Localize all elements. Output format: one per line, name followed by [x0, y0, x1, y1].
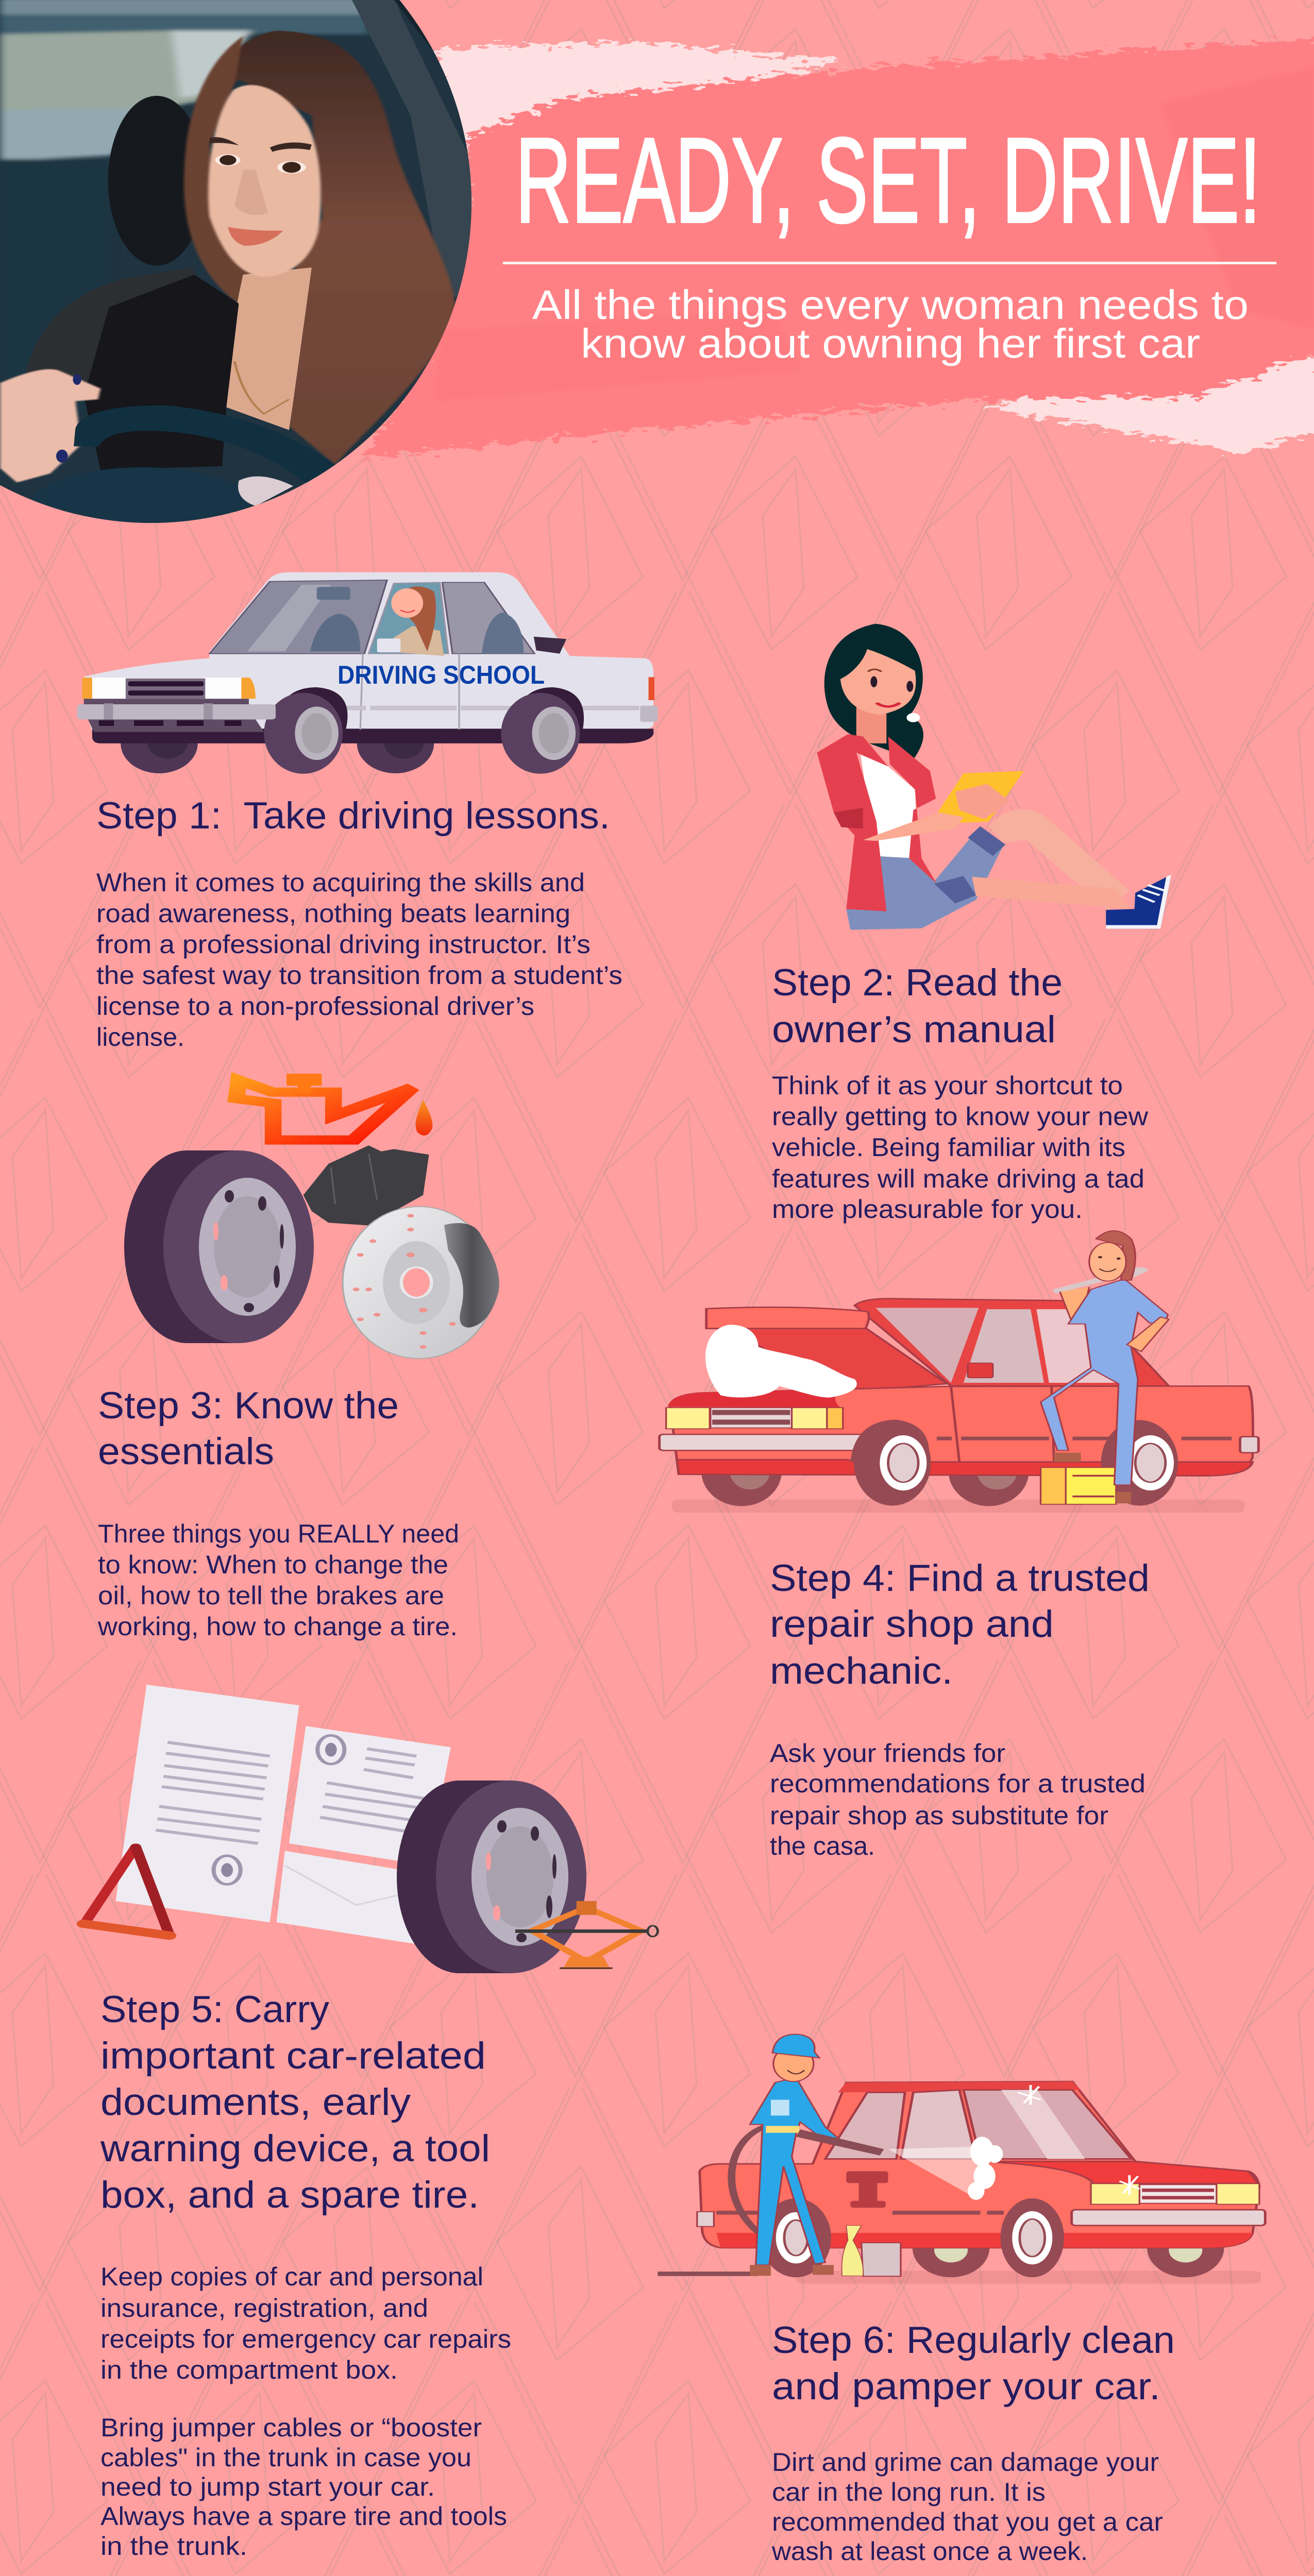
- heading: step 4: [770, 1557, 1150, 1692]
- body: step 4: Ask your friends for: [770, 1739, 1005, 1768]
- body: step 5: receipts for emergency car repairs: [100, 2325, 511, 2353]
- heading: step 4: repair shop and: [770, 1603, 1054, 1645]
- heading: step 6: Step 6: Regularly clean: [772, 2319, 1175, 2361]
- body: step 1: license.: [96, 1023, 184, 1052]
- body: step 5: in the trunk.: [100, 2532, 247, 2561]
- heading: step 5: box, and a spare tire.: [100, 2174, 479, 2216]
- body: step 1: road awareness, nothing beats learning: [96, 899, 570, 928]
- smoke: [705, 1325, 857, 1398]
- body: step 6: car in the long run. It is: [772, 2478, 1046, 2506]
- body: step 3: oil, how to tell the brakes are: [98, 1581, 444, 1610]
- body: step 3: working, how to change a tire.: [97, 1612, 458, 1641]
- illustration: car wash: [658, 2034, 1265, 2284]
- hose: [658, 2126, 767, 2274]
- car jack: [515, 1901, 658, 1968]
- body: step 5: insurance, registration, and: [100, 2294, 428, 2323]
- body: step 1: license to a non-professional driver’s: [96, 992, 534, 1021]
- body: step 3: [97, 1519, 459, 1641]
- body: step 5: Bring jumper cables or “booster: [100, 2413, 482, 2442]
- body: step 2: more pleasurable for you.: [772, 1195, 1083, 1224]
- header divider: [503, 262, 1276, 264]
- illustration: oil can, tyre and brake: [124, 1074, 499, 1359]
- heading: step 1: Step 1: Take driving lessons.: [96, 795, 610, 837]
- icon: oil can: [237, 1074, 432, 1140]
- heading: step 2: Step 2: Read the: [772, 962, 1063, 1004]
- heading: step 5: Step 5: Carry: [100, 1989, 330, 2030]
- heading: step 5: [100, 1989, 490, 2216]
- spray and foam: [888, 2147, 980, 2198]
- heading: step 2: [772, 962, 1063, 1050]
- body: step 2: [772, 1071, 1149, 1224]
- body: step 4: repair shop as substitute for: [770, 1801, 1108, 1830]
- heading: step 5: documents, early: [100, 2081, 411, 2123]
- icon: tyre: [124, 1150, 314, 1343]
- heading: step 3: essentials: [98, 1431, 274, 1472]
- warning triangle: [84, 1847, 169, 1936]
- body: step 4: recommendations for a trusted: [770, 1769, 1145, 1798]
- body: step 6: Dirt and grime can damage your: [772, 2448, 1159, 2477]
- driving school label: DRIVING SCHOOL: [338, 660, 545, 689]
- body: step 1: [96, 868, 622, 1052]
- body: step 1: When it comes to acquiring the skills and: [96, 868, 585, 897]
- body: step 1: from a professional driving instructor. It’s: [96, 930, 591, 959]
- body: step 5: Keep copies of car and personal: [100, 2262, 483, 2291]
- icon: brake disc and pad: [304, 1145, 499, 1359]
- body: step 3: Three things you REALLY need: [98, 1519, 459, 1548]
- body: step 6: wash at least once a week.: [771, 2537, 1088, 2566]
- body: step 4: the casa.: [770, 1832, 875, 1860]
- body: step 2: really getting to know your new: [772, 1102, 1149, 1131]
- heading: step 5: warning device, a tool: [100, 2128, 490, 2170]
- body: step 6: recommended that you get a car: [772, 2507, 1163, 2536]
- heading: step 3: Step 3: Know the: [98, 1385, 399, 1427]
- subtitle: [532, 282, 1249, 366]
- body: step 3: to know: When to change the: [98, 1550, 448, 1579]
- body: step 4: [770, 1739, 1145, 1860]
- heading: step 6: and pamper your car.: [772, 2366, 1160, 2408]
- body: step 6: [771, 2448, 1163, 2566]
- heading: step 3: [98, 1385, 399, 1472]
- illustration: woman reading manual: [817, 624, 1171, 930]
- heading: step 2: owner’s manual: [772, 1009, 1056, 1050]
- mechanic and toolbox: [1040, 1231, 1169, 1504]
- body: step 2: vehicle. Being familiar with its: [772, 1133, 1125, 1162]
- heading: step 5: important car-related: [100, 2035, 486, 2077]
- heading: step 6: [772, 2319, 1175, 2408]
- body: step 5: Always have a spare tire and tools: [100, 2502, 507, 2531]
- body: step 5: [100, 2262, 511, 2561]
- body: step 2: features will make driving a tad: [772, 1164, 1144, 1193]
- body: step 1: the safest way to transition from a student’s: [96, 961, 622, 990]
- heading: step 4: Step 4: Find a trusted: [770, 1557, 1150, 1599]
- body: step 5: in the compartment box.: [100, 2355, 398, 2384]
- header brush stroke: [361, 39, 1314, 459]
- subtitle: All the things every woman needs to: [532, 282, 1249, 328]
- subtitle: know about owning her first car: [581, 320, 1200, 366]
- illustration: white driving school car: [77, 572, 658, 774]
- attendant: [750, 2034, 884, 2276]
- spare tyre: [397, 1781, 586, 1973]
- body: step 5: cables" in the trunk in case you: [100, 2443, 471, 2472]
- illustration: red car with open hood and mechanic: [660, 1231, 1258, 1513]
- heading: step 4: mechanic.: [770, 1650, 953, 1692]
- illustration: documents, warning triangle, spare tyre, jack: [84, 1685, 658, 1973]
- body: step 2: Think of it as your shortcut to: [772, 1071, 1123, 1100]
- body: step 5: need to jump start your car.: [100, 2472, 435, 2501]
- driver photo in circle: [0, 0, 471, 523]
- bucket and spray bottle: [862, 2243, 901, 2276]
- documents: [115, 1685, 451, 1944]
